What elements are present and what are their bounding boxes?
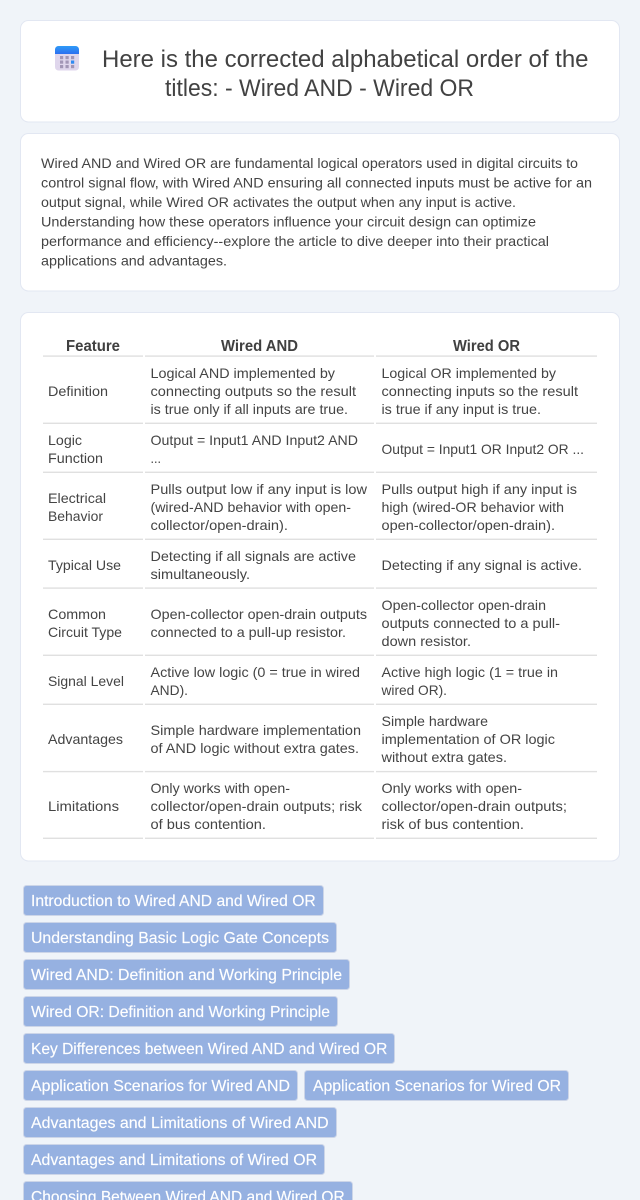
panel: topic tags [24, 886, 568, 1200]
row: Typical Use: simultaneously. [150, 566, 250, 582]
row: Advantages: Simple hardware implementation [150, 722, 361, 738]
tag: Basic Logic Gate Concepts: Understanding Basic Logic Gate Concepts [31, 930, 329, 947]
row: Advantages [43, 713, 597, 772]
row: Electrical Behavior: Pulls output high if any input is [382, 481, 577, 497]
row: Advantages: of AND logic without extra gates. [150, 740, 359, 756]
row: Electrical Behavior: collector/open-drain). [150, 517, 288, 533]
tag: Choosing Between [24, 1182, 352, 1200]
table header: Feature [66, 338, 120, 355]
row: Signal Level [43, 664, 597, 705]
tag: Application Scenarios OR: Application Scenarios for Wired OR [313, 1078, 561, 1095]
intro text block: Understanding how these operators influence your circuit design can optimize [41, 214, 536, 230]
intro text block: control signal flow, with Wired AND ensuring all connected inputs must be active for an [41, 174, 592, 190]
row: Common Circuit Type: Circuit Type [48, 624, 122, 640]
row: Logic Function [43, 432, 597, 473]
row: Signal Level: Active high logic (1 = true in [382, 664, 558, 680]
tag: Application Scenarios AND: Application Scenarios for Wired AND [31, 1078, 290, 1095]
heading [102, 46, 588, 102]
tag: Key Differences [24, 1034, 394, 1064]
intro text block: performance and efficiency--explore the article to dive deeper into their practical [41, 233, 549, 249]
row: Typical Use [43, 548, 597, 589]
row: Common Circuit Type: Open-collector open-drain outputs [150, 606, 367, 622]
row: Limitations: collector/open-drain outputs; risk [150, 798, 363, 814]
row: Typical Use: Detecting if all signals are active [150, 548, 356, 564]
icon: calendar [55, 46, 79, 70]
row: Logic Function: ... [150, 450, 161, 466]
row: Common Circuit Type: outputs connected to a pull- [382, 615, 560, 631]
row: Logic Function: Function [48, 450, 103, 466]
row: Common Circuit Type: connected to a pull-up resistor. [150, 624, 346, 640]
row: Definition: connecting outputs so the result [150, 383, 356, 399]
row: Limitations: Limitations [48, 798, 119, 814]
tag: Advantages AND [24, 1108, 336, 1138]
row: Typical Use: Detecting if any signal is active. [382, 557, 582, 573]
row: Electrical Behavior [43, 481, 597, 540]
row: Signal Level: wired OR). [381, 682, 447, 698]
intro text block: Wired AND and Wired OR are fundamental logical operators used in digital circuits to [41, 155, 578, 171]
row: Limitations: Only works with open- [382, 780, 522, 796]
row: Limitations: Only works with open- [150, 780, 290, 796]
row: Electrical Behavior: high (wired-OR behavior with [382, 499, 564, 515]
row: Signal Level: Signal Level [48, 673, 124, 689]
row: Definition: is true if any input is true. [382, 401, 541, 417]
intro text block [41, 155, 592, 268]
panel: comparison table [20, 312, 620, 861]
row: Common Circuit Type [43, 597, 597, 656]
heading: Here is the corrected alphabetical order of the [102, 46, 588, 73]
row: Logic Function: Logic [48, 432, 82, 448]
table header: Wired AND [221, 338, 298, 355]
tag: Wired AND definition [24, 960, 350, 990]
row: Electrical Behavior: (wired-AND behavior with open- [150, 499, 351, 515]
row: Definition: Definition [48, 383, 108, 399]
row: Limitations: of bus contention. [150, 816, 266, 832]
tag: Introduction: Introduction to Wired AND and Wired OR [31, 893, 316, 910]
intro text block: applications and advantages. [41, 252, 227, 268]
row: Common Circuit Type: Common [48, 606, 106, 622]
table header [43, 338, 597, 357]
row: Electrical Behavior: open-collector/open-drain). [382, 517, 555, 533]
row: Common Circuit Type: Open-collector open-drain [382, 597, 546, 613]
tag: Key Differences: Key Differences between Wired AND and Wired OR [31, 1041, 387, 1058]
row: Definition: Logical AND implemented by [150, 365, 335, 381]
tag: Advantages AND: Advantages and Limitations of Wired AND [31, 1115, 329, 1132]
tag: Introduction [24, 886, 324, 916]
row: Limitations: collector/open-drain outputs; [382, 798, 567, 814]
row: Typical Use: Typical Use [48, 557, 121, 573]
row: Electrical Behavior: Pulls output low if any input is low [150, 481, 368, 497]
row: Definition [43, 365, 597, 424]
panel: introduction [20, 134, 620, 291]
panel: title [20, 20, 620, 122]
row: Advantages: Simple hardware [382, 713, 488, 729]
row: Electrical Behavior: Electrical [48, 490, 106, 506]
row: Electrical Behavior: Behavior [48, 508, 103, 524]
tag: Advantages OR: Advantages and Limitations of Wired OR [31, 1152, 317, 1169]
intro text block: output signal, while Wired OR activates the output when any input is active. [41, 194, 516, 210]
row: Limitations: risk of bus contention. [382, 816, 524, 832]
tag: Application Scenarios AND [24, 1070, 298, 1100]
row: Logic Function: Output = Input1 OR Input2 OR ... [382, 441, 584, 457]
row: Definition: is true only if all inputs are true. [150, 401, 348, 417]
row: Signal Level: AND). [150, 682, 188, 698]
row: Advantages: Advantages [48, 731, 123, 747]
row: Advantages: implementation of OR logic [382, 731, 555, 747]
row: Logic Function: Output = Input1 AND Input2 AND [150, 432, 358, 448]
tag: Application Scenarios OR [304, 1070, 568, 1100]
tag: Wired OR definition [24, 996, 338, 1026]
heading: titles: - Wired AND - Wired OR [165, 75, 474, 102]
tag: Basic Logic Gate Concepts [24, 922, 336, 952]
row: Definition: connecting inputs so the result [382, 383, 578, 399]
tag: Wired AND definition: Wired AND: Definition and Working Principle [31, 967, 342, 984]
row: Signal Level: Active low logic (0 = true in wired [150, 664, 360, 680]
tag: Wired OR definition: Wired OR: Definition and Working Principle [31, 1004, 330, 1021]
row: Advantages: without extra gates. [380, 749, 507, 765]
row: Definition: Logical OR implemented by [382, 365, 556, 381]
row: Common Circuit Type: down resistor. [382, 633, 471, 649]
tag: Advantages OR [24, 1144, 324, 1174]
row: Limitations [43, 780, 597, 839]
table header: Wired OR [453, 338, 520, 355]
